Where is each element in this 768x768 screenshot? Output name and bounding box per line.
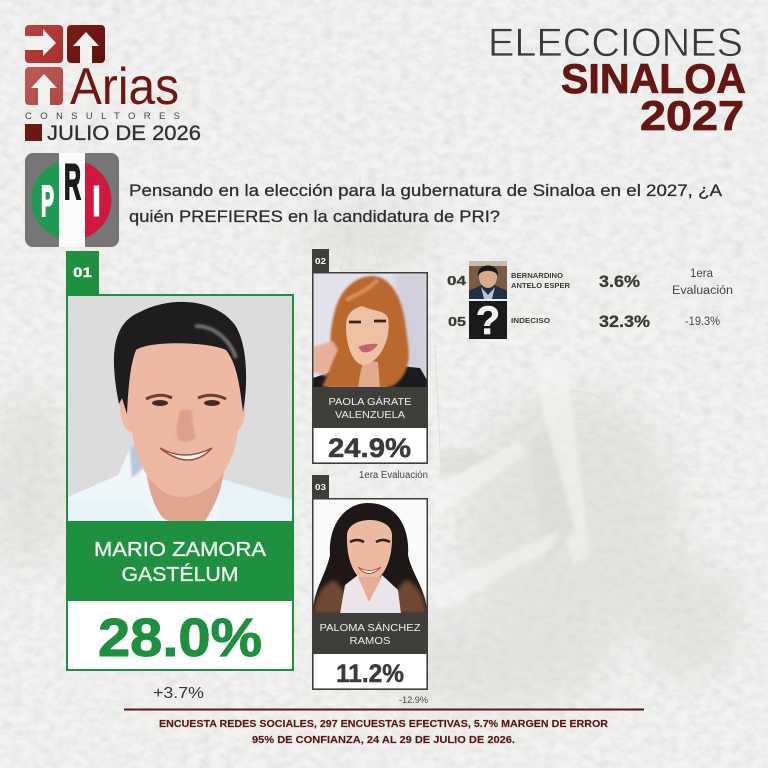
change +3.7%: +3.7% bbox=[153, 685, 204, 702]
note 1era Evaluacion: Evaluación bbox=[672, 285, 733, 297]
footer rule bbox=[124, 708, 644, 710]
portrait: Paloma Sanchez bbox=[313, 499, 427, 614]
percentage 28.0%: 28.0% bbox=[98, 608, 262, 668]
title: ELECCIONES bbox=[488, 21, 743, 65]
logo subtitle: CONSULTORES bbox=[25, 111, 180, 122]
percentage 32.3%: 32.3% bbox=[599, 312, 650, 331]
name: INDECISO bbox=[511, 316, 550, 325]
rank tab 03: 03 bbox=[315, 483, 327, 492]
note 1era Evaluacion bbox=[672, 268, 733, 297]
footer methodology note: 95% DE CONFIANZA, 24 AL 29 DE JULIO DE 2026. bbox=[252, 734, 515, 746]
panel: candidate 01 bbox=[66, 251, 294, 702]
panel: candidate 03 bbox=[312, 475, 429, 706]
faint monument sketch watermark bbox=[0, 175, 740, 710]
title bbox=[488, 21, 746, 139]
percentage 24.9%: 24.9% bbox=[328, 433, 411, 463]
portrait: Mario Zamora bbox=[68, 296, 292, 521]
question text bbox=[129, 181, 723, 226]
logo: Arias Consultores bbox=[25, 25, 180, 122]
icon: arrow up square light bbox=[25, 67, 63, 105]
name band bbox=[312, 387, 428, 428]
name band bbox=[312, 613, 428, 654]
name band bbox=[66, 521, 294, 601]
rank 05: 05 bbox=[448, 314, 466, 329]
row: candidate 04 bbox=[447, 261, 733, 299]
footer methodology note: ENCUESTA REDES SOCIALES, 297 ENCUESTAS EFECTIVAS, 5.7% MARGEN DE ERROR bbox=[159, 718, 608, 730]
icon: arrow up square dark bbox=[67, 25, 105, 63]
rank tab 02 bbox=[312, 249, 329, 273]
note 1era Evaluacion: 1era bbox=[690, 268, 714, 280]
icon: PRI party logo: R bbox=[64, 154, 81, 210]
panel: candidate 02 bbox=[312, 249, 428, 481]
icon: PRI party logo bbox=[25, 153, 119, 247]
name band: PAOLA GÁRATE bbox=[328, 395, 412, 408]
icon: arrow right square bbox=[25, 25, 63, 63]
change -19.3%: -19.3% bbox=[685, 316, 720, 328]
question text: Pensando en la elección para la gubernatura de Sinaloa en el 2027, ¿A bbox=[129, 181, 723, 200]
name: BERNARDINO bbox=[511, 271, 563, 280]
icon: question mark: ? bbox=[476, 299, 500, 343]
question text: quién PREFIERES en la candidatura de PRI? bbox=[129, 207, 500, 226]
change -12.9%: -12.9% bbox=[399, 695, 429, 706]
card frame bbox=[313, 499, 427, 689]
name bbox=[511, 271, 571, 290]
rank tab 01 bbox=[66, 251, 99, 294]
title: SINALOA bbox=[561, 55, 746, 102]
name band: RAMOS bbox=[350, 636, 391, 647]
name band: MARIO ZAMORA bbox=[94, 539, 267, 561]
date label: JULIO DE 2026 bbox=[47, 122, 201, 145]
card frame bbox=[67, 295, 293, 670]
name: ANTELO ESPER bbox=[511, 281, 571, 290]
icon: PRI party logo: P bbox=[41, 177, 54, 226]
name band: VALENZUELA bbox=[335, 410, 405, 421]
rank tab 02: 02 bbox=[315, 257, 327, 266]
title: 2027 bbox=[640, 92, 744, 139]
rank 04: 04 bbox=[447, 273, 467, 288]
name band: PALOMA SÁNCHEZ bbox=[320, 621, 420, 634]
icon: PRI party logo: I bbox=[92, 177, 101, 226]
portrait: Bernardino Antelo bbox=[469, 261, 507, 299]
percentage 3.6%: 3.6% bbox=[599, 272, 640, 291]
portrait: Paola Garate bbox=[313, 273, 427, 388]
icon: question mark bbox=[469, 299, 507, 343]
footer methodology note bbox=[159, 718, 608, 746]
row: candidate 05 bbox=[448, 299, 720, 343]
rank tab 01: 01 bbox=[73, 264, 92, 280]
rank tab 03 bbox=[312, 475, 329, 499]
percentage 11.2%: 11.2% bbox=[336, 660, 404, 688]
logo wordmark: Arias bbox=[70, 58, 179, 116]
note 1era Evaluacion: 1era Evaluación bbox=[359, 470, 428, 481]
card frame bbox=[313, 273, 427, 463]
name band: GASTÉLUM bbox=[122, 563, 238, 586]
